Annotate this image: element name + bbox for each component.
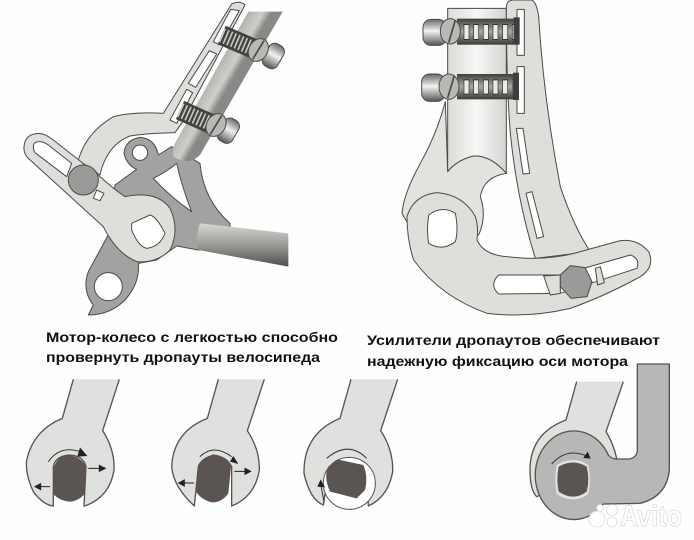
torque arm (535, 364, 669, 520)
plate slot (33, 142, 72, 177)
main plate (407, 193, 651, 315)
left arrow (35, 484, 50, 490)
torque arm (78, 2, 245, 175)
slot remainder near bolt (93, 190, 104, 201)
dropout (26, 379, 119, 506)
wrench diagram 2: axle leaning (172, 379, 264, 506)
upper clamp (222, 35, 287, 71)
rotation arrow (48, 450, 80, 462)
dropout body (86, 137, 230, 315)
wrench diagram 3: axle rotated in worn dropout (304, 379, 398, 509)
diagram: dropout with torque arm, angled view (24, 2, 288, 315)
worn opening (323, 457, 375, 509)
logo dots (589, 504, 618, 527)
upper clamp (423, 17, 520, 45)
right arrow (234, 468, 251, 474)
axle (557, 462, 588, 497)
logo word: Avito (620, 500, 682, 533)
rotation arrow (321, 484, 324, 502)
wrench diagram 1: axle starts to spread dropout (26, 379, 119, 506)
axle (53, 455, 86, 502)
strap slots (170, 9, 239, 123)
watermark: Avito (589, 500, 682, 533)
axle (196, 455, 231, 502)
dropout (172, 379, 264, 506)
chain stay tube (197, 223, 288, 267)
lug hole (132, 145, 148, 160)
dropout (304, 379, 398, 506)
rotation arrow (200, 450, 232, 457)
caption: right: Усилители дропаутов обеспечивают (367, 332, 660, 348)
slotted plate (24, 133, 175, 262)
axle hole (427, 210, 457, 247)
seat stay tube (173, 12, 283, 161)
strap slots (516, 9, 544, 238)
rotation arrow (552, 453, 587, 464)
diagram: dropout with torque arm, side view (402, 0, 651, 315)
bolt (68, 165, 98, 195)
strap through slot (544, 275, 560, 295)
rotation arc (327, 449, 367, 458)
rear plate (402, 102, 506, 235)
caption: right: надежную фиксацию оси мотора (367, 353, 628, 369)
plate slot (494, 255, 638, 294)
dropout cut-out (153, 163, 192, 212)
axle slot (555, 460, 590, 499)
wrench diagram 4: dropout secured by torque arm (530, 364, 669, 520)
hanger hole (94, 273, 122, 301)
left arrow (179, 480, 194, 486)
axle (326, 459, 366, 498)
dropout (530, 382, 623, 497)
lower clamp (180, 110, 242, 146)
bolt (560, 266, 592, 298)
axle hole (132, 215, 165, 248)
strap (506, 0, 590, 258)
caption: left: провернуть дропауты велосипеда (46, 349, 320, 365)
lower clamp (422, 73, 519, 101)
stay tube (448, 8, 506, 173)
right arrow (88, 465, 105, 471)
caption: left: Мотор-колесо с легкостью способно (46, 329, 338, 345)
